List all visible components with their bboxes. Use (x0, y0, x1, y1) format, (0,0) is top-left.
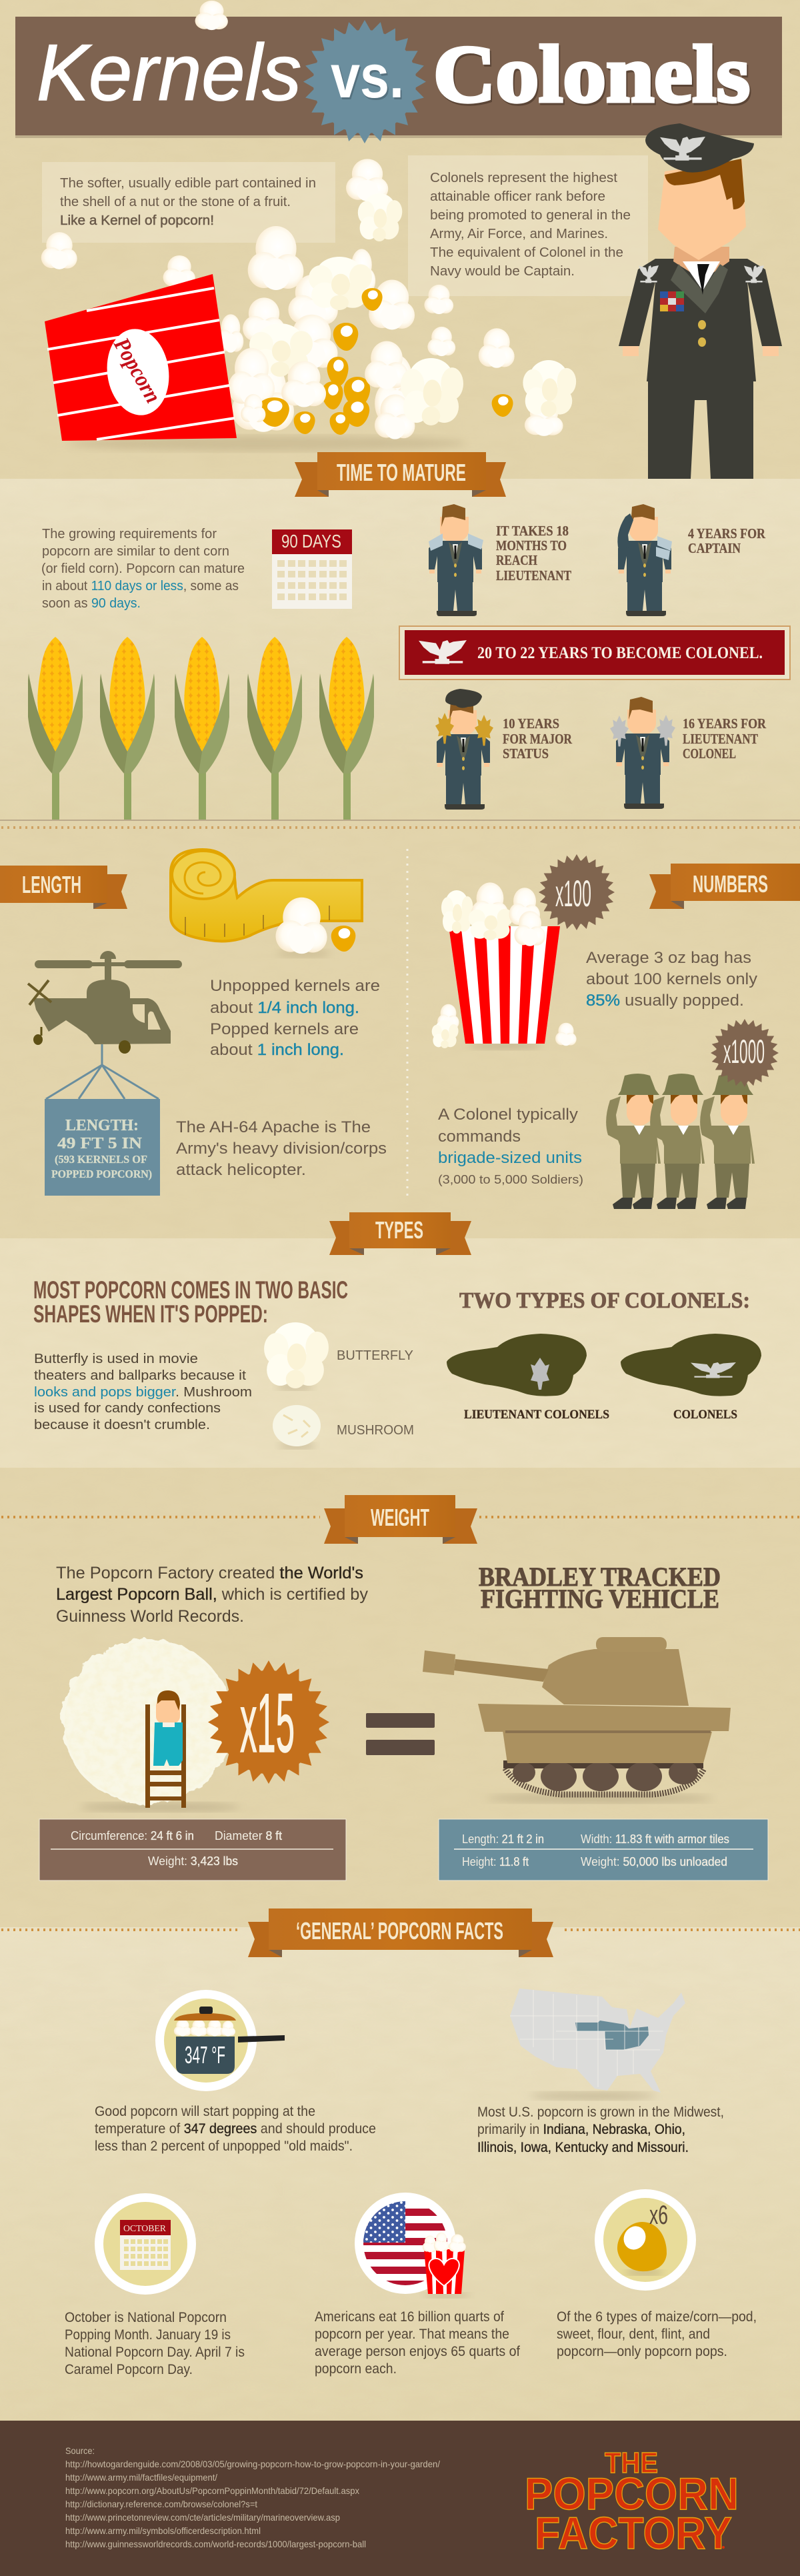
ribbon: general popcorn facts (248, 1908, 553, 1957)
ribbon: types (329, 1212, 471, 1255)
stats panel: tank (439, 1819, 768, 1880)
text: bag stat: about 100 kernels only (586, 970, 757, 988)
text: midwest growing: Illinois, Iowa, Kentucky and Missouri. (477, 2140, 689, 2155)
sources list: http://www.guinnessworldrecords.com/world-records/1000/largest-popcorn-ball (65, 2539, 366, 2549)
text: national popcorn month: Caramel Popcorn Day. (65, 2362, 193, 2377)
soldier: major: STATUS (503, 746, 549, 762)
text: quarts per year: average person enjoys 65 quarts of (315, 2344, 520, 2359)
text box: colonel definition: being promoted to general in the (430, 208, 631, 223)
heading: popcorn shapes (33, 1276, 348, 1328)
icon: lieutenant colonel cap (447, 1334, 609, 1422)
crate: helicopter length (45, 1044, 160, 1196)
text: kernel sizes: about 1 inch long. (210, 1041, 344, 1059)
text: midwest growing (477, 2105, 724, 2155)
illustration: Bradley tank (423, 1637, 731, 1803)
text: largest popcorn ball: The Popcorn Factory created the World's (56, 1564, 363, 1582)
text box: kernel definition: Like a Kernel of popcorn! (60, 213, 214, 228)
crate: helicopter length: 49 FT 5 IN (57, 1135, 143, 1152)
title banner (15, 1, 782, 143)
icon: mushroom popcorn (273, 1405, 414, 1449)
ribbon: weight (324, 1495, 477, 1544)
stats panel: tank: Height: 11.8 ft (462, 1855, 529, 1868)
text: brigade: (3,000 to 5,000 Soldiers) (438, 1173, 583, 1186)
badge: x1000 (711, 1019, 779, 1087)
text: midwest growing: primarily in Indiana, Nebraska, Ohio, (477, 2122, 685, 2137)
exploding popcorn pile (41, 159, 576, 451)
text: Apache helicopter (176, 1118, 387, 1179)
text: types of maize: sweet, flour, dent, flint, and (557, 2327, 710, 2342)
text: popping temperature: less than 2 percent of unpopped "old maids". (95, 2139, 353, 2154)
icon: butterfly popcorn: BUTTERFLY (337, 1348, 413, 1363)
text box: colonel definition: attainable officer rank before (430, 189, 605, 204)
ribbon: weight: WEIGHT (371, 1504, 429, 1531)
text: Apache helicopter: Army's heavy division/corps (176, 1140, 387, 1158)
text: popping temperature: Good popcorn will start popping at the (95, 2104, 315, 2119)
illustration: three saluting soldiers (606, 1074, 755, 1209)
ribbon: types: TYPES (375, 1216, 423, 1244)
badge: x100 (539, 854, 615, 930)
stats panel: tank: Width: 11.83 ft with armor tiles (581, 1832, 729, 1846)
sources list: Source: (65, 2445, 95, 2456)
icon: single kernel x6: x6 (649, 2201, 668, 2230)
sources list: http://www.princetonreview.com/cte/articles/military/marineoverview.asp (65, 2512, 340, 2523)
sources list: http://www.popcorn.org/AboutUs/PopcornPoppinMonth/tabid/72/Default.aspx (65, 2485, 359, 2496)
text: kernel sizes: about 1/4 inch long. (210, 999, 359, 1017)
sources list: http://howtogardenguide.com/2008/03/05/growing-popcorn-how-to-grow-popcorn-in-your-garden/ (65, 2459, 440, 2469)
soldier: lieutenant: REACH (496, 552, 537, 568)
soldier: captain (617, 504, 766, 616)
text: quarts per year (315, 2309, 520, 2377)
stats panel: popcorn ball (39, 1819, 346, 1880)
text: types of maize: Of the 6 types of maize/corn—pod, (557, 2309, 757, 2325)
heading: popcorn shapes: MOST POPCORN COMES IN TWO BASIC (33, 1276, 348, 1304)
text box: colonel definition: Army, Air Force, and Marines. (430, 227, 608, 241)
ribbon: time to mature: TIME TO MATURE (337, 459, 466, 486)
text: growing requirements: in about 110 days or less, some as (42, 579, 239, 593)
text: bag stat: Average 3 oz bag has (586, 949, 751, 967)
text box: kernel definition: The softer, usually edible part contained in (60, 176, 316, 191)
soldier: major: FOR MAJOR (503, 731, 573, 747)
icon: October calendar (95, 2193, 196, 2295)
illustration: popcorn ball with man on ladder (62, 1639, 240, 1812)
heading: Bradley fighting vehicle (479, 1562, 721, 1614)
title word: Colonels: Colonels (433, 29, 750, 119)
ribbon: numbers (649, 864, 800, 909)
illustration: helicopter (28, 951, 182, 1054)
soldier: lieutenant: LIEUTENANT (496, 567, 571, 583)
logo: The Popcorn Factory: FACTORY (535, 2508, 732, 2559)
icon: 90 days calendar: 90 DAYS (281, 531, 341, 551)
text: kernel sizes: Unpopped kernels are (210, 977, 380, 995)
text: butterfly and mushroom: Butterfly is used in movie (34, 1352, 198, 1366)
text: butterfly and mushroom: because it doesn't crumble. (34, 1418, 210, 1432)
text: growing requirements (41, 527, 245, 611)
icon: butterfly popcorn (264, 1322, 413, 1390)
soldier: lieutenant: MONTHS TO (496, 537, 567, 553)
illustration: five corn stalks (27, 637, 375, 820)
soldier: lieutenant: IT TAKES 18 (496, 523, 569, 539)
icon: lieutenant colonel cap: LIEUTENANT COLONELS (464, 1408, 609, 1422)
soldier: lieutenant colonel (610, 697, 767, 809)
text box: kernel definition: the shell of a nut or the stone of a fruit. (60, 195, 291, 209)
text: national popcorn month: October is National Popcorn (65, 2310, 227, 2325)
crate: helicopter length: LENGTH: (65, 1117, 139, 1134)
stats panel: popcorn ball: Weight: 3,423 lbs (148, 1854, 238, 1868)
icon: measuring tape (171, 850, 362, 941)
text: brigade (438, 1106, 583, 1186)
illustration: colonel officer (619, 123, 782, 479)
map: United States midwest (510, 1989, 685, 2100)
text box: colonel definition (408, 155, 648, 296)
footer panel (0, 2421, 800, 2576)
soldier: lieutenant colonel: LIEUTENANT (683, 731, 758, 747)
soldier: major (435, 689, 573, 810)
text: Apache helicopter: The AH-64 Apache is The (176, 1118, 371, 1136)
icon: 90 days calendar (272, 529, 352, 609)
soldier: lieutenant colonel: COLONEL (683, 746, 736, 762)
text: brigade: brigade-sized units (438, 1149, 582, 1167)
sources list: http://dictionary.reference.com/browse/colonel?s=t (65, 2499, 257, 2509)
title word: Kernels: Kernels (37, 28, 301, 117)
title word: Colonels: Colonels (435, 31, 751, 121)
callout: 20 to 22 years: 20 TO 22 YEARS TO BECOME COLONEL. (477, 644, 763, 662)
soldier: lieutenant (429, 504, 571, 616)
soldier: captain: 4 YEARS FOR (688, 525, 766, 541)
text: national popcorn month: Popping Month. January 19 is (65, 2327, 231, 2343)
crate: helicopter length: (593 KERNELS OF (55, 1153, 147, 1166)
popcorn puff at top of banner (195, 1, 228, 30)
text: kernel sizes: Popped kernels are (210, 1020, 359, 1038)
heading: popcorn shapes: SHAPES WHEN IT'S POPPED: (33, 1300, 268, 1328)
text: national popcorn month (65, 2310, 245, 2377)
icon: pot at 347 degrees: 347 °F (185, 2041, 225, 2069)
ribbon: length (0, 866, 127, 909)
icon: US flag with popcorn box (355, 2193, 470, 2298)
text: popping temperature: temperature of 347 degrees and should produce (95, 2121, 376, 2137)
icon: popped and unpopped kernel (275, 898, 355, 958)
man (153, 1690, 183, 1766)
logo: The Popcorn Factory: POPCORN (525, 2469, 739, 2519)
soldier: major: 10 YEARS (503, 716, 559, 732)
text: Apache helicopter: attack helicopter. (176, 1161, 306, 1179)
logo: The Popcorn Factory (525, 2447, 739, 2559)
text: quarts per year: popcorn per year. That means the (315, 2327, 509, 2342)
sources list: http://www.army.mil/symbols/officerdescription.html (65, 2525, 261, 2536)
text: popping temperature (95, 2104, 376, 2154)
text: kernel sizes (210, 977, 380, 1059)
text: bag stat (586, 949, 757, 1010)
stats panel: tank: Weight: 50,000 lbs unloaded (581, 1855, 727, 1868)
icon: red popcorn box (45, 274, 237, 441)
text: brigade: commands (438, 1128, 521, 1146)
heading: Bradley fighting vehicle: BRADLEY TRACKED (479, 1562, 721, 1592)
icon: colonel cap: COLONELS (673, 1408, 737, 1422)
text: growing requirements: popcorn are similar to dent corn (42, 544, 229, 559)
stats panel: popcorn ball: Diameter 8 ft (215, 1829, 282, 1842)
text: types of maize: popcorn—only popcorn pops. (557, 2344, 727, 2359)
ribbon: length: LENGTH (22, 871, 81, 898)
badge: x15 (208, 1660, 329, 1784)
sources list (65, 2445, 440, 2549)
text: growing requirements: soon as 90 days. (42, 596, 141, 611)
text box: kernel definition (42, 162, 335, 243)
text: largest popcorn ball: Guinness World Records. (56, 1607, 244, 1626)
text: quarts per year: Americans eat 16 billion quarts of (315, 2309, 504, 2325)
text: butterfly and mushroom: looks and pops bigger . Mushroom (34, 1385, 252, 1400)
vs label: vs. (331, 43, 404, 111)
vs label: vs. (332, 45, 405, 113)
text box: colonel definition: The equivalent of Colonel in the (430, 245, 623, 260)
text: national popcorn month: National Popcorn Day. April 7 is (65, 2345, 245, 2360)
text box: colonel definition: Navy would be Captain. (430, 264, 575, 279)
soldier: lieutenant colonel: 16 YEARS FOR (683, 716, 767, 732)
soldier: captain: CAPTAIN (688, 540, 741, 556)
icon: October calendar: OCTOBER (123, 2224, 167, 2234)
text: midwest growing: Most U.S. popcorn is grown in the Midwest, (477, 2105, 724, 2120)
ribbon: time to mature (295, 452, 506, 497)
text: brigade: A Colonel typically (438, 1106, 578, 1124)
logo: The Popcorn Factory: THE (605, 2447, 658, 2479)
text: butterfly and mushroom: theaters and ballparks because it (34, 1368, 246, 1383)
ladder (145, 1704, 186, 1808)
text: butterfly and mushroom (34, 1352, 252, 1432)
heading: Bradley fighting vehicle: FIGHTING VEHICLE (481, 1584, 719, 1614)
burst badge (303, 20, 426, 143)
text box: colonel definition: Colonels represent the highest (430, 171, 617, 185)
crate: helicopter length: POPPED POPCORN) (51, 1168, 152, 1180)
text: bag stat: 85% usually popped. (586, 992, 744, 1010)
heading: two types of colonels: TWO TYPES OF COLONELS: (459, 1288, 750, 1313)
stats panel: popcorn ball: Circumference: 24 ft 6 in (71, 1829, 194, 1842)
icon: mushroom popcorn: MUSHROOM (337, 1423, 414, 1438)
badge: x15: x15 (240, 1677, 295, 1770)
icon: colonel cap (621, 1334, 761, 1422)
equals sign (366, 1713, 435, 1755)
illustration: popcorn bucket (432, 882, 577, 1050)
icon: single kernel x6 (595, 2189, 696, 2291)
badge: x100: x100 (555, 872, 591, 914)
icon: red popcorn box: Popcorn (109, 333, 165, 407)
sources list: http://www.army.mil/factfiles/equipment/ (65, 2472, 217, 2483)
text: largest popcorn ball: Largest Popcorn Ball, which is certified by (56, 1585, 368, 1604)
text: types of maize (557, 2309, 757, 2359)
stats panel: tank: Length: 21 ft 2 in (462, 1832, 544, 1846)
ribbon: general popcorn facts: ‘GENERAL’ POPCORN FACTS (296, 1917, 503, 1945)
icon: pot at 347 degrees (155, 1990, 285, 2091)
text: growing requirements: (or field corn). Popcorn can mature (41, 561, 245, 576)
callout: 20 to 22 years (399, 626, 790, 680)
text: largest popcorn ball (56, 1564, 368, 1626)
text: butterfly and mushroom: is used for candy confections (34, 1401, 221, 1416)
text: growing requirements: The growing requirements for (42, 527, 217, 541)
text: quarts per year: popcorn each. (315, 2361, 397, 2377)
